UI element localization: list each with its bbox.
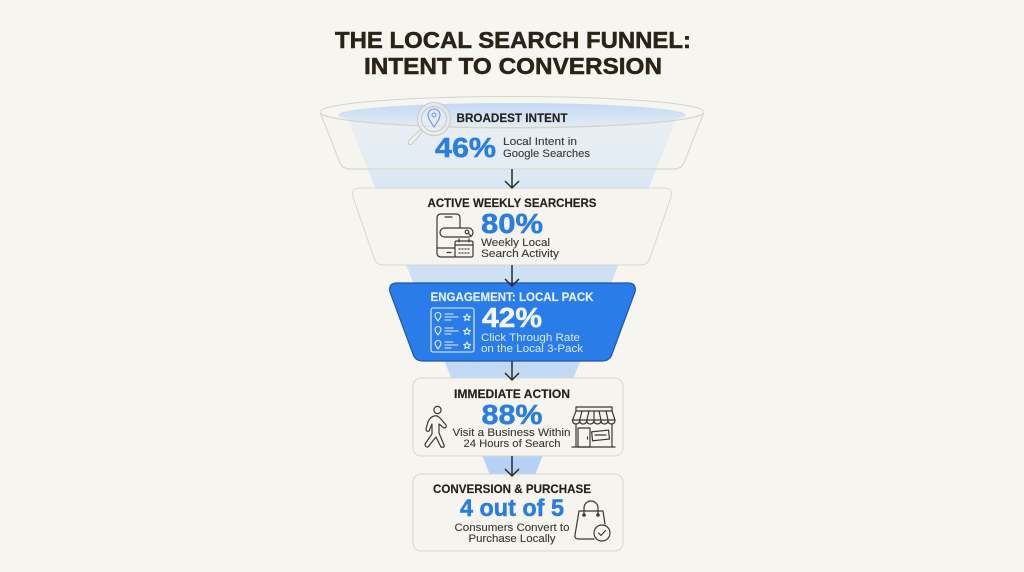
title: THE LOCAL SEARCH FUNNEL: <box>335 27 691 53</box>
description <box>481 332 584 355</box>
icon: walking person <box>425 406 446 447</box>
funnel rim <box>320 96 704 128</box>
funnel inner surface <box>338 103 686 127</box>
funnel stem <box>345 112 679 475</box>
description: Search Activity <box>481 248 560 260</box>
heading: BROADEST INTENT <box>456 111 568 125</box>
heading: IMMEDIATE ACTION <box>454 387 570 401</box>
panel: immediate action <box>413 378 623 456</box>
heading: ACTIVE WEEKLY SEARCHERS <box>428 196 596 210</box>
stat: 80% <box>481 208 543 239</box>
arrow: action to purchase <box>505 456 519 476</box>
card shape <box>390 283 635 361</box>
stat: 42% <box>482 302 542 333</box>
heading: ENGAGEMENT: LOCAL PACK <box>430 290 594 304</box>
description: Click Through Rate <box>481 332 580 344</box>
icon: phone with search bar and calendar <box>437 214 473 257</box>
description: Purchase Locally <box>468 533 556 545</box>
description <box>481 237 560 260</box>
description: Weekly Local <box>481 237 550 249</box>
stat: 46% <box>435 132 496 163</box>
description: on the Local 3-Pack <box>481 343 584 355</box>
stat: 4 out of 5 <box>460 495 564 522</box>
arrow: broadest to weekly <box>505 169 519 188</box>
stat: 88% <box>482 399 543 430</box>
description <box>503 136 591 160</box>
panel: engagement local pack <box>390 283 635 361</box>
description <box>454 522 570 545</box>
panel: active weekly searchers <box>353 188 671 265</box>
funnel bowl body <box>320 112 704 169</box>
icon: magnifier with pin <box>408 102 450 145</box>
description: 24 Hours of Search <box>464 438 560 450</box>
icon: shopping bag with check <box>575 501 610 541</box>
arrow: weekly to local pack <box>505 265 519 286</box>
card shape <box>413 378 623 456</box>
description: Local Intent in <box>503 136 577 148</box>
description <box>452 427 570 450</box>
title <box>335 27 691 79</box>
description: Visit a Business Within <box>452 427 570 439</box>
description: Google Searches <box>503 148 591 160</box>
panel: broadest intent <box>320 96 704 169</box>
card shape <box>353 188 671 265</box>
panel: conversion and purchase <box>413 474 623 551</box>
description: Consumers Convert to <box>454 522 570 534</box>
icon: local pack listing <box>431 308 474 352</box>
icon: storefront <box>572 407 615 447</box>
arrow: local pack to action <box>505 361 519 380</box>
card shape <box>413 474 623 551</box>
heading: CONVERSION & PURCHASE <box>433 482 591 496</box>
title: INTENT TO CONVERSION <box>364 53 662 79</box>
